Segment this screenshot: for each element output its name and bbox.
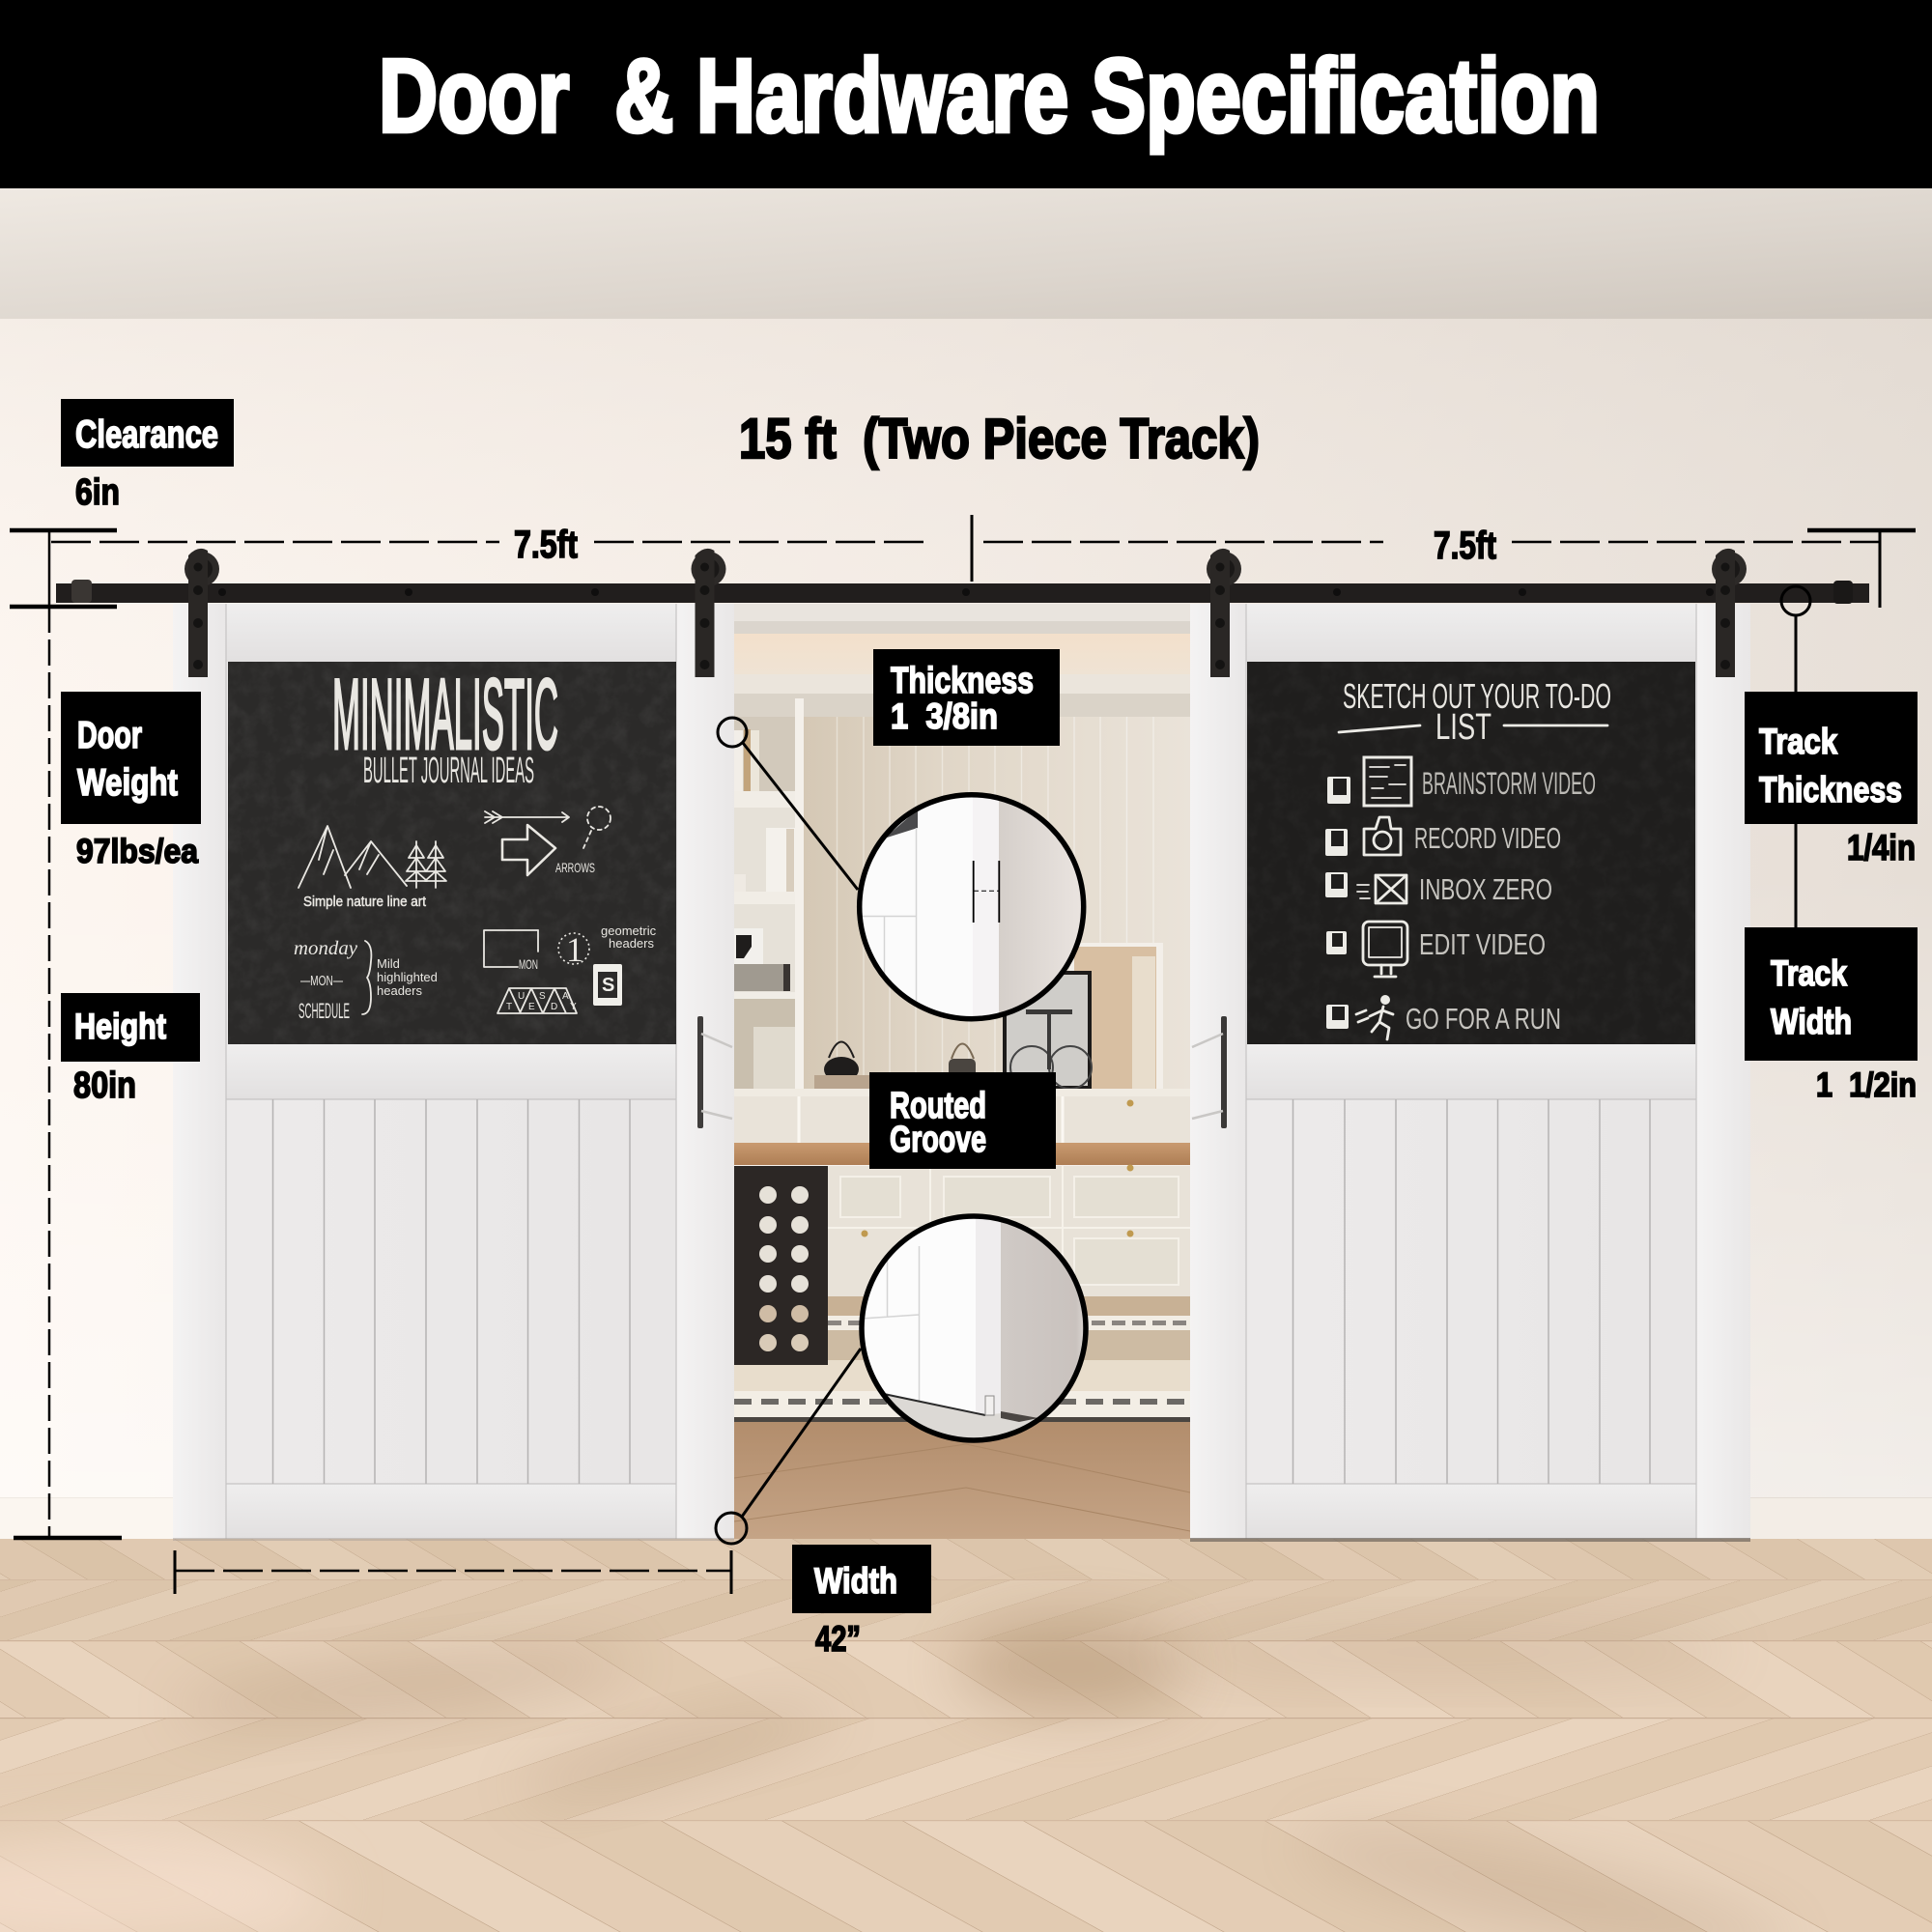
todo: brainstorm video — [1327, 757, 1596, 806]
chalk caption nature: Simple nature line art — [303, 894, 427, 910]
framed art — [1003, 943, 1163, 1090]
leader: bottom door corner to magnifier — [716, 1349, 861, 1544]
teapots — [814, 1041, 976, 1089]
callout: track thickness: 1/4in — [1847, 828, 1916, 867]
geometric headers sketch: Y — [570, 1002, 577, 1012]
chalk heading: SKETCH OUT YOUR TO-DO — [1343, 676, 1611, 716]
todo: inbox zero: INBOX ZERO — [1419, 872, 1552, 906]
callout: door weight: 97lbs/ea — [76, 833, 198, 870]
chalk mild highlighted headers: highlighted — [377, 970, 438, 984]
centre tick — [970, 515, 974, 582]
geometric headers sketch — [484, 923, 657, 1013]
label: 15 ft two piece track: 15 ft (Two Piece Track) — [739, 408, 1260, 470]
callout: door weight: Weight — [77, 762, 178, 804]
callout: track thickness: Thickness — [1759, 770, 1902, 810]
callout: routed groove: Groove — [890, 1120, 986, 1160]
clearance bracket left — [10, 530, 117, 607]
callout: height: 80in — [73, 1065, 136, 1106]
todo: edit video — [1326, 922, 1546, 977]
callout: thickness — [873, 649, 1060, 746]
cabinets and counter — [734, 1089, 1190, 1296]
top dashed dimension left — [51, 541, 930, 543]
callout: track width: Track — [1771, 953, 1847, 993]
geometric headers sketch: E — [528, 1002, 535, 1012]
callout: track width — [1745, 927, 1918, 1104]
todo: go for a run: GO FOR A RUN — [1406, 1002, 1561, 1036]
chalk mon: —MON— — [300, 973, 343, 989]
callout: height: Height — [74, 1007, 166, 1046]
chalk list word: LIST — [1435, 707, 1492, 748]
todo: record video — [1325, 817, 1561, 856]
chalkboard: minimalistic bullet journal: BULLET JOURNAL IDEAS — [363, 751, 534, 791]
magnifier: door thickness detail — [855, 790, 1088, 1022]
callout: width: 42” — [815, 1619, 861, 1659]
chalk brace — [362, 941, 371, 1014]
geometric headers sketch: MON — [519, 956, 538, 972]
title banner: Door & Hardware Specification — [379, 37, 1600, 154]
door handle — [1192, 1016, 1227, 1128]
geometric headers sketch: geometric — [601, 923, 657, 938]
track leader line and marker — [1781, 586, 1810, 927]
right door — [1190, 604, 1750, 1542]
todo: inbox zero — [1325, 872, 1552, 906]
callout: width: Width — [814, 1561, 897, 1601]
geometric headers sketch: T — [506, 1002, 512, 1012]
geometric headers sketch: headers — [609, 936, 654, 951]
perforated desk leg — [734, 1166, 828, 1365]
hanger strap 1 — [185, 549, 219, 677]
label: 7.5ft left: 7.5ft — [514, 524, 578, 566]
geometric headers sketch: A — [562, 991, 569, 1002]
callout: routed groove — [869, 1072, 1056, 1169]
todo: edit video: EDIT VIDEO — [1419, 927, 1546, 961]
todo: go for a run — [1326, 995, 1561, 1039]
bookshelf — [734, 698, 804, 1090]
callout: track thickness — [1745, 692, 1918, 867]
geometric headers sketch: D — [551, 1002, 557, 1012]
chalk mild highlighted headers: Mild — [377, 956, 400, 971]
top dashed dimension right — [983, 541, 1879, 543]
interior room seen through the opening — [734, 604, 1190, 1539]
beadboard back wall — [804, 717, 1190, 1090]
todo: brainstorm video: BRAINSTORM VIDEO — [1422, 766, 1596, 801]
chalkboard: minimalistic bullet journal — [228, 659, 676, 1044]
geometric headers sketch: S — [602, 975, 614, 996]
hanger strap 2 — [692, 549, 726, 677]
callout: clearance: 6in — [75, 472, 120, 513]
wall — [0, 319, 1932, 1539]
todo: record video: RECORD VIDEO — [1414, 821, 1561, 855]
arrow sketches — [485, 807, 611, 875]
callout: height — [61, 993, 200, 1106]
magnifier: routed groove detail — [858, 1212, 1090, 1444]
width dimension line — [175, 1550, 731, 1594]
chalkboard: to-do list — [1247, 662, 1695, 1044]
geometric headers sketch: 1 — [566, 930, 583, 969]
callout: door weight — [61, 692, 201, 870]
sliding track rail — [56, 580, 1869, 604]
chalk underline strokes — [1339, 725, 1607, 732]
callout: thickness: Thickness — [891, 661, 1034, 701]
callout: clearance: Clearance — [75, 413, 218, 456]
floor and rug inside the room — [734, 1296, 1190, 1539]
callout: track width: Width — [1771, 1002, 1852, 1041]
callout: width — [792, 1545, 931, 1659]
callout: thickness: 1 3/8in — [891, 696, 998, 736]
left door — [173, 604, 734, 1541]
chalk mild highlighted headers: headers — [377, 983, 422, 998]
chalkboard: minimalistic bullet journal: MINIMALISTIC — [332, 659, 558, 771]
track stoppers — [71, 580, 1853, 604]
callout: track thickness: Track — [1759, 722, 1837, 761]
label: 7.5ft right: 7.5ft — [1434, 525, 1496, 567]
geometric headers sketch: U — [518, 991, 525, 1002]
chalk caption arrows: ARROWS — [555, 860, 595, 875]
chalk monday: monday — [294, 938, 357, 959]
clearance bracket right — [1807, 530, 1916, 608]
leader: top door corner to magnifier — [718, 718, 858, 890]
title banner — [0, 0, 1932, 188]
mountains sketch — [298, 826, 446, 888]
herringbone wood floor — [0, 1539, 1932, 1932]
ceiling band — [0, 188, 1932, 319]
hanger strap 4 — [1712, 549, 1747, 677]
callout: clearance — [61, 399, 234, 513]
callout: track width: 1 1/2in — [1816, 1066, 1917, 1104]
chalkboard: minimalistic bullet journal: SCHEDULE — [298, 999, 350, 1023]
callout: routed groove: Routed — [890, 1086, 986, 1126]
hanger strap 3 — [1207, 549, 1241, 677]
geometric headers sketch: S — [539, 991, 546, 1002]
callout: door weight: Door — [77, 715, 142, 756]
door handle — [697, 1016, 732, 1128]
height dimension line — [14, 607, 122, 1538]
